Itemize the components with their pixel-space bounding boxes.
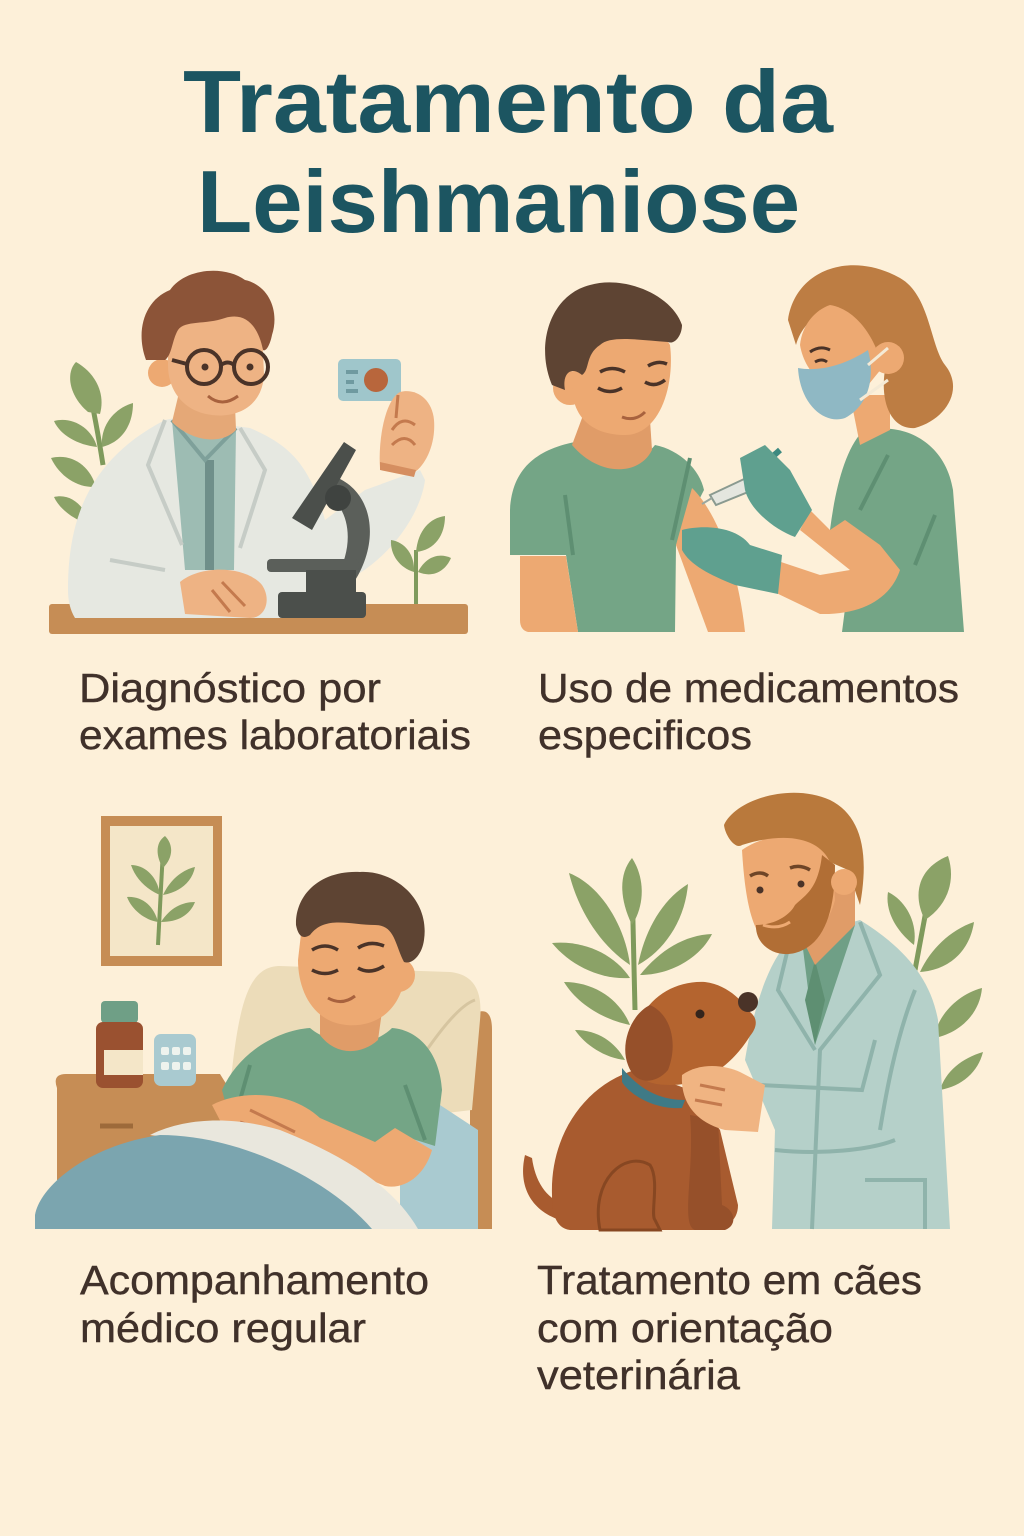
bed frame [470, 1011, 492, 1229]
title: Leishmaniose [197, 152, 800, 251]
icon: left plant [51, 362, 133, 525]
icon: framed plant [101, 816, 222, 966]
hand on desk [180, 570, 267, 618]
nurse neck and head [788, 265, 953, 445]
man torso [222, 1028, 442, 1160]
man head [296, 872, 425, 1051]
pillow [225, 966, 481, 1130]
boy head [545, 282, 682, 469]
man arms [212, 1095, 432, 1187]
shirt and tie [172, 420, 236, 570]
head [142, 271, 274, 439]
icon: face mask [798, 348, 888, 419]
panel: veterinary illustration [523, 793, 983, 1230]
panel: medical follow-up illustration [35, 816, 492, 1229]
vet head [724, 793, 864, 965]
dog [523, 982, 758, 1230]
boy shirt [510, 442, 704, 632]
caption: medical follow-up line two: médico regular [80, 1305, 366, 1351]
vet hand on dog [682, 1066, 765, 1132]
panel: medication illustration [510, 265, 964, 632]
caption: veterinary line two: com orientação [537, 1305, 833, 1351]
icon: sample card [338, 359, 401, 401]
icon: medicine bottle [96, 1001, 143, 1088]
lab coat [68, 418, 425, 618]
panel: diagnosis illustration [49, 271, 468, 634]
nurse arms [770, 510, 900, 614]
caption: veterinary line three: veterinária [537, 1352, 740, 1398]
caption: diagnosis: Diagnóstico por [79, 665, 381, 711]
icon: pill box [154, 1034, 196, 1086]
blanket [35, 1135, 372, 1229]
title: Tratamento da [183, 52, 834, 151]
icon: syringe [702, 450, 780, 505]
caption: medication: Uso de medicamentos [538, 665, 959, 711]
icon: small plant [391, 516, 451, 604]
desk [49, 604, 468, 634]
title [183, 52, 834, 251]
gloves [682, 445, 812, 594]
icon: microscope [267, 442, 370, 618]
nurse body [830, 429, 964, 632]
caption: medical follow-up: Acompanhamento [80, 1257, 429, 1303]
sheet right [400, 1105, 478, 1229]
nightstand [56, 1074, 230, 1180]
icon: right plant [887, 856, 983, 1090]
caption: medication line two: especificos [538, 712, 752, 758]
icon: glasses [172, 350, 268, 384]
caption: diagnosis line two: exames laboratoriais [79, 712, 471, 758]
vet coat [745, 920, 950, 1229]
raised hand [380, 391, 434, 477]
blanket fold [150, 1120, 418, 1229]
boy arms [520, 488, 745, 632]
caption: veterinary: Tratamento em cães [537, 1257, 922, 1303]
icon: large plant [552, 858, 712, 1060]
